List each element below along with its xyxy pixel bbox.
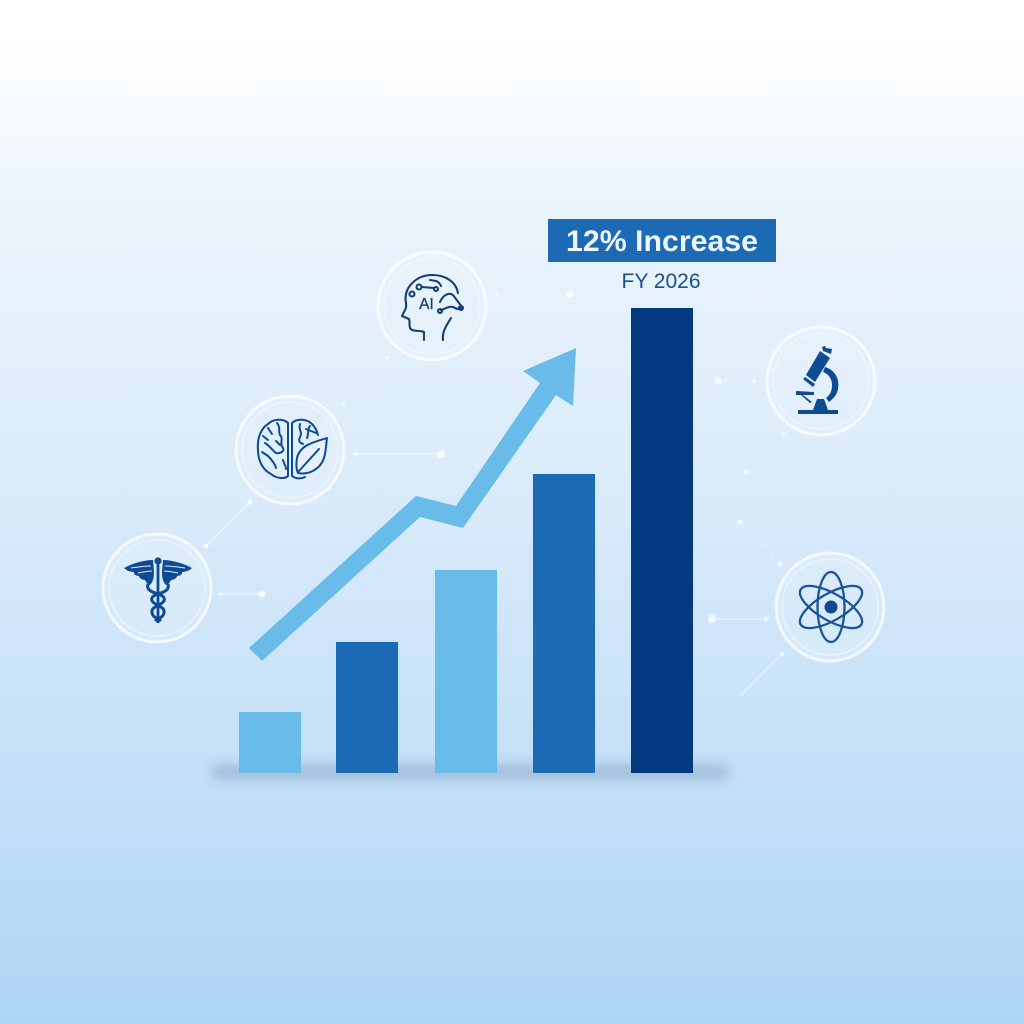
callout: 12% Increase: [548, 219, 776, 262]
bar 3: [435, 570, 497, 773]
icon: atom: [776, 553, 884, 661]
callout: 12% Increase: 12% Increase: [566, 225, 758, 258]
icon: brain and leaf: [236, 396, 344, 504]
AI text: AI: [419, 296, 434, 313]
bar 4: [533, 474, 595, 773]
bar 1: [239, 712, 301, 773]
bar chart: [212, 308, 728, 779]
bar 5: FY 2026: [631, 308, 693, 773]
icon: caduceus: [103, 534, 211, 642]
icon: AI head: [378, 252, 486, 360]
growth arrow: [249, 348, 576, 661]
icon: microscope: [767, 327, 875, 435]
bar 2: [336, 642, 398, 773]
ground shadow: [212, 765, 728, 779]
connector lines and dots: [204, 291, 784, 696]
label: FY 2026: FY 2026: [622, 270, 700, 293]
